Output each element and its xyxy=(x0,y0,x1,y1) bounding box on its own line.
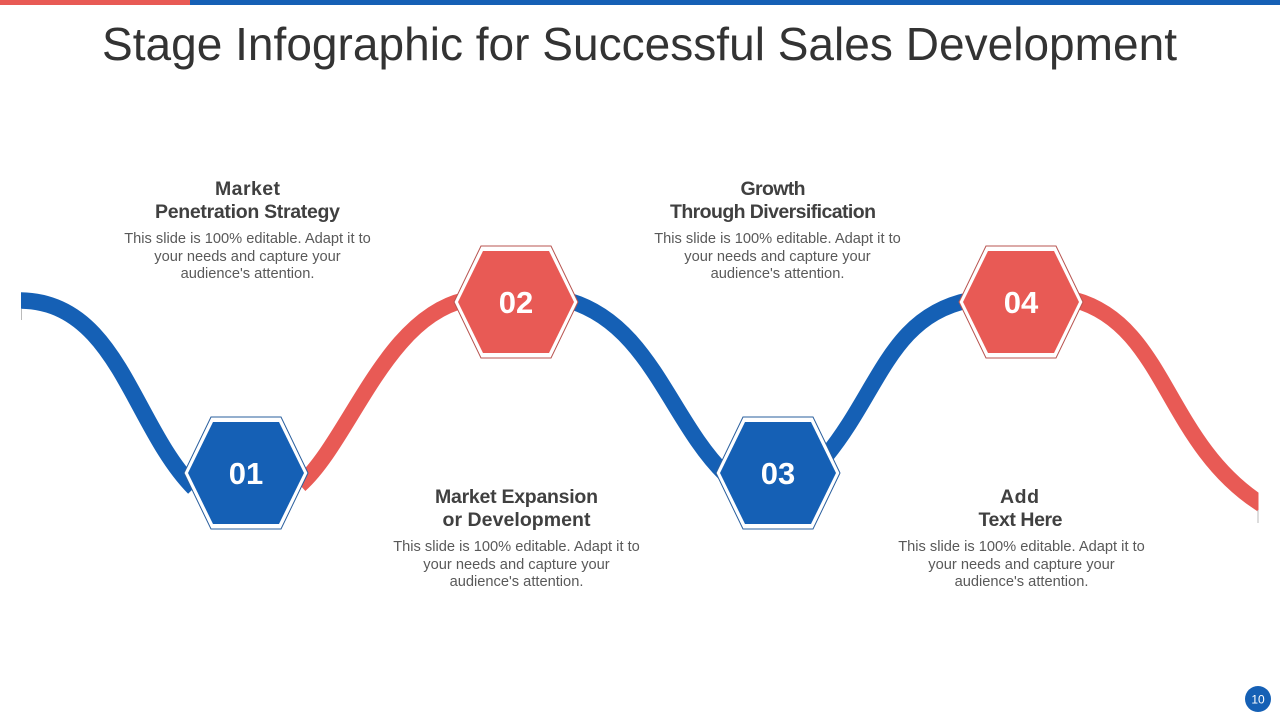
stage 04 hexagon xyxy=(959,246,1083,358)
text block: add text here: This slide is 100% editable. Adapt it to xyxy=(898,539,1145,555)
text block: growth through diversification: This slide is 100% editable. Adapt it to xyxy=(654,231,901,247)
stage 04 hexagon: 04 xyxy=(1004,285,1039,320)
text block: market expansion or development: Market Expansion xyxy=(435,486,598,508)
text block: market penetration strategy: Penetration Strategy xyxy=(155,201,340,223)
wave segment 1 xyxy=(12,300,194,488)
stage 01 hexagon: 01 xyxy=(229,456,263,491)
text block: market penetration strategy: audience's attention. xyxy=(181,266,314,282)
text block: growth through diversification: your needs and capture your xyxy=(684,249,871,265)
text block: add text here: Add xyxy=(1000,486,1039,508)
text block: growth through diversification: Through Diversification xyxy=(670,201,876,223)
text block: add text here: Text Here xyxy=(978,509,1063,531)
wave end tick left xyxy=(21,309,22,320)
text block: market expansion or development: audience's attention. xyxy=(450,574,583,590)
page number badge xyxy=(1245,686,1271,712)
stage 01 hexagon xyxy=(184,417,308,529)
text block: market penetration strategy: your needs and capture your xyxy=(154,249,341,265)
text block: add text here: your needs and capture your xyxy=(928,557,1115,573)
stage 03 hexagon: 03 xyxy=(761,456,795,491)
text block: growth through diversification: Growth xyxy=(740,178,806,200)
text block: market expansion or development: or Development xyxy=(442,509,591,531)
wave segment 3 xyxy=(570,301,725,474)
stage 03 hexagon xyxy=(716,417,840,529)
wave end tick right xyxy=(1258,510,1259,523)
stage 02 hexagon xyxy=(454,246,578,358)
text block: market penetration strategy: This slide is 100% editable. Adapt it to xyxy=(124,231,371,247)
page number badge: 10 xyxy=(1251,692,1265,706)
text block: market expansion or development: This slide is 100% editable. Adapt it to xyxy=(393,539,640,555)
text block: add text here xyxy=(898,486,1145,590)
stage 02 hexagon: 02 xyxy=(499,285,533,320)
text block: add text here: audience's attention. xyxy=(955,574,1088,590)
text block: growth through diversification xyxy=(654,178,901,282)
top accent bar xyxy=(0,0,1280,5)
title: Stage Infographic for Successful Sales Development xyxy=(102,18,1177,70)
text block: growth through diversification: audience's attention. xyxy=(711,266,844,282)
text block: market expansion or development: your needs and capture your xyxy=(423,557,610,573)
wave segment 5 xyxy=(1075,300,1270,510)
wave segment 4 xyxy=(826,300,970,456)
text block: market expansion or development xyxy=(393,486,640,590)
text block: market penetration strategy: Market xyxy=(215,178,280,200)
text block: market penetration strategy xyxy=(124,178,371,282)
wave segment 2 xyxy=(300,300,465,485)
